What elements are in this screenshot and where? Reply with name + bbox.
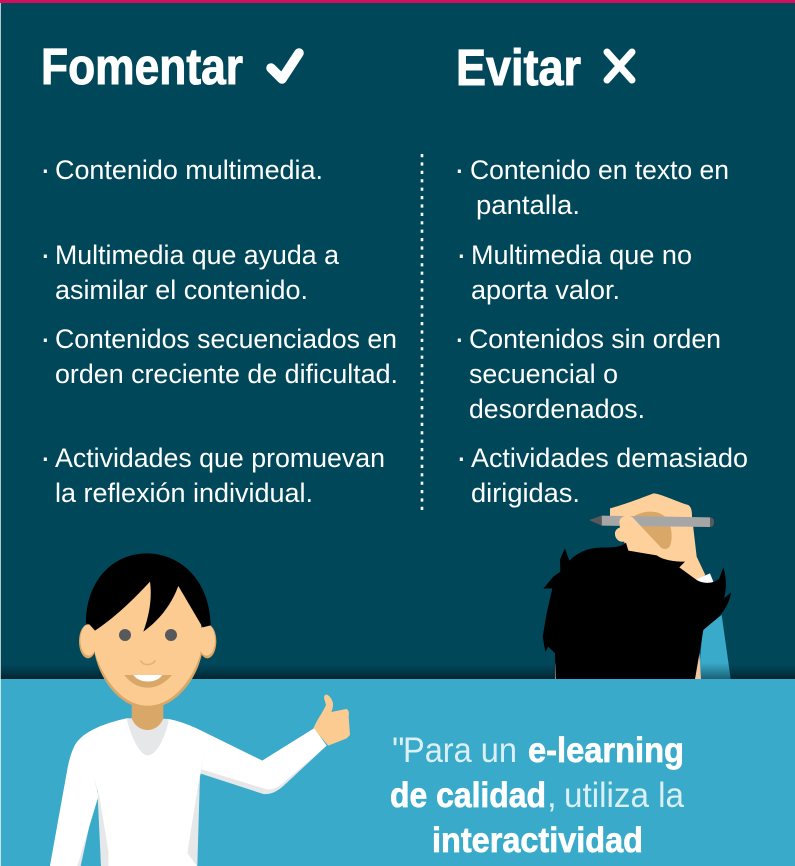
list: Evitar items: ·: [454, 151, 465, 187]
teeth: [133, 675, 162, 681]
quote text: de calidad: [390, 776, 546, 815]
list: Evitar items: ·: [456, 439, 467, 475]
mouth: [124, 675, 172, 688]
neck: [132, 697, 163, 730]
list: Evitar items: desordenados.: [469, 394, 645, 424]
list: Evitar items: dirigidas.: [471, 478, 580, 508]
quote text: e-learning: [528, 731, 684, 770]
divider dotted line: [421, 154, 423, 511]
list: Evitar items: Contenido en texto en: [470, 155, 729, 185]
list: Fomentar items: la reflexión individual.: [55, 478, 313, 508]
list: Evitar items: Contenidos sin orden: [469, 324, 721, 354]
list: Fomentar items: Contenido multimedia.: [55, 155, 323, 185]
list: Evitar items: aporta valor.: [471, 275, 620, 305]
quote text: utiliza la: [564, 776, 685, 815]
top accent bar: [0, 0, 795, 3]
heading: Evitar: Evitar: [456, 39, 581, 96]
ears: [79, 624, 216, 658]
left edge line: [0, 3, 1, 866]
nose: [140, 660, 155, 665]
illustration: smiling man with thumb up: [50, 553, 350, 866]
quote text: Para un: [403, 731, 517, 770]
list: Fomentar items: Contenidos secuenciados en: [55, 324, 397, 354]
list: Fomentar items: orden creciente de dificultad.: [55, 359, 398, 389]
list: Evitar items: ·: [454, 320, 465, 356]
background: dark panel: [0, 0, 795, 680]
panel: quote band: [0, 679, 795, 866]
list: Evitar items: pantalla.: [476, 190, 580, 220]
list: Evitar items: [454, 151, 748, 508]
list: Fomentar items: ·: [40, 236, 51, 272]
list: Fomentar items: ·: [40, 151, 51, 187]
list: Evitar items: secuencial o: [469, 359, 618, 389]
list: Fomentar items: ·: [40, 320, 51, 356]
list: Evitar items: Multimedia que no: [471, 240, 692, 270]
illustration: person writing, seen from behind: [543, 493, 731, 679]
quote text: ,: [547, 776, 557, 815]
list: Evitar items: ·: [456, 236, 467, 272]
list: Fomentar items: Actividades que promuevan: [55, 443, 385, 473]
hand: thumb up: [313, 695, 350, 746]
list: Fomentar items: ·: [40, 439, 51, 475]
quote text: interactividad: [432, 821, 643, 860]
heading: Fomentar: Fomentar: [41, 38, 243, 95]
shirt: [50, 718, 327, 866]
list: Fomentar items: Multimedia que ayuda a: [55, 240, 340, 270]
icon: cross mark: [607, 52, 632, 80]
hair: [86, 553, 211, 632]
list: Fomentar items: [40, 151, 398, 508]
quote text: [390, 731, 685, 860]
eyes: [119, 629, 177, 641]
list: Evitar items: Actividades demasiado: [471, 443, 748, 473]
head: [94, 577, 202, 708]
icon: check mark: [271, 53, 299, 79]
list: Fomentar items: asimilar el contenido.: [55, 275, 308, 305]
quote text: ": [392, 731, 404, 770]
panel shadow: [0, 664, 795, 679]
